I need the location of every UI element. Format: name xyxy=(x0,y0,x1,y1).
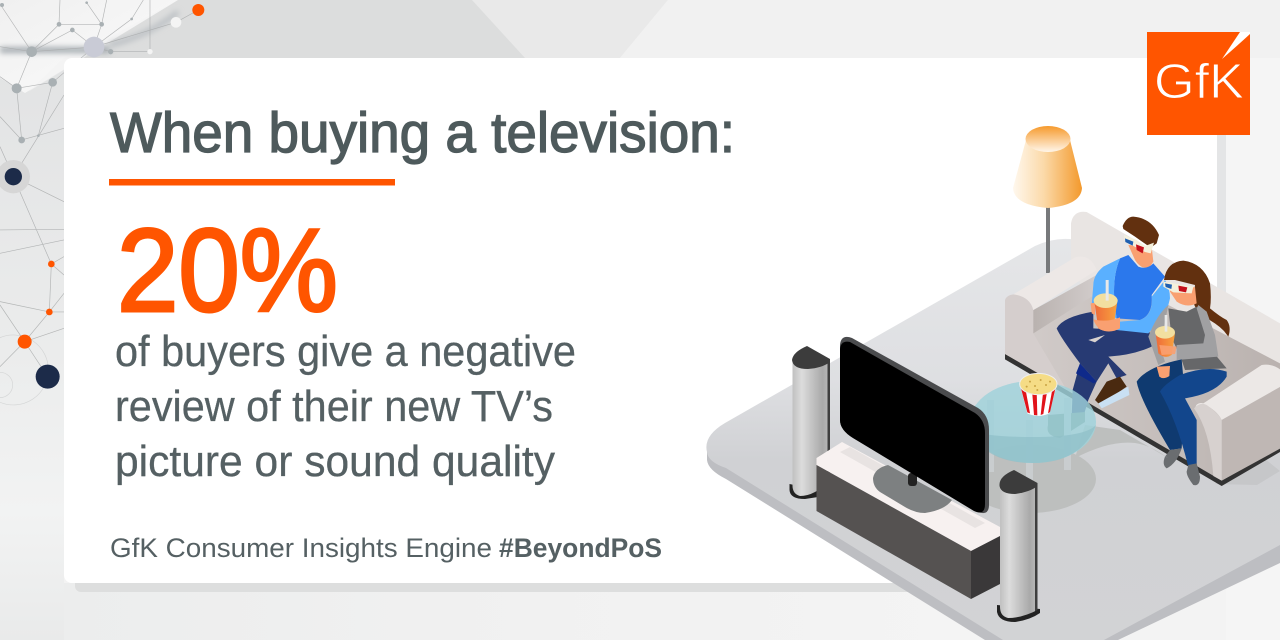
node halos xyxy=(0,160,30,193)
shoe xyxy=(1095,377,1127,405)
logo slash xyxy=(1222,32,1250,59)
head xyxy=(1128,245,1153,268)
source line xyxy=(110,533,662,563)
sweater xyxy=(1114,255,1165,320)
white nodes xyxy=(147,17,181,54)
TV cabinet xyxy=(816,442,1000,599)
orange nodes xyxy=(18,4,204,349)
drink xyxy=(1156,333,1175,357)
right speaker xyxy=(997,470,1040,622)
white card xyxy=(64,58,1217,583)
jeans xyxy=(1137,359,1185,450)
faint concentric circles xyxy=(0,335,48,405)
decorative network of nodes xyxy=(0,0,204,405)
statistic description: picture or sound quality xyxy=(115,437,555,486)
popcorn bucket xyxy=(1020,373,1057,416)
navy nodes xyxy=(5,168,60,389)
sofa and people xyxy=(1005,212,1280,486)
floor lamp xyxy=(1013,126,1082,273)
left speaker xyxy=(790,346,830,499)
shoes xyxy=(1164,448,1182,468)
hair xyxy=(1123,217,1159,248)
man xyxy=(1057,217,1170,417)
television xyxy=(840,337,989,513)
sofa floor shadow xyxy=(1215,455,1280,485)
sweater xyxy=(1168,307,1227,370)
source line: GfK Consumer Insights Engine xyxy=(110,533,492,563)
far leg behind the table xyxy=(1072,363,1097,417)
3D glasses xyxy=(1124,235,1154,253)
statistic description xyxy=(115,327,576,486)
source line: #BeyondPoS xyxy=(499,533,662,563)
big statistic: 20% xyxy=(117,205,338,337)
orange divider xyxy=(109,179,395,186)
hand xyxy=(1093,317,1120,331)
card shadow xyxy=(75,570,915,592)
large lilac node xyxy=(84,37,104,57)
wall stripe xyxy=(1216,58,1226,338)
statistic description: of buyers give a negative xyxy=(115,327,576,376)
heading: When buying a television: xyxy=(110,101,735,165)
hair xyxy=(1164,261,1230,337)
hand xyxy=(1157,366,1170,378)
face xyxy=(1170,285,1197,305)
grey nodes xyxy=(0,1,133,143)
TV stand xyxy=(873,465,952,513)
GfK logo xyxy=(1147,32,1250,135)
coffee table xyxy=(964,373,1168,513)
3D glasses xyxy=(1163,282,1193,293)
drink xyxy=(1091,303,1095,315)
shoe seen through glass xyxy=(1048,412,1085,438)
jeans xyxy=(1057,312,1152,382)
sofa xyxy=(1005,212,1280,486)
illustration: living room xyxy=(706,126,1280,640)
logo wordmark: GfK xyxy=(1154,55,1244,109)
floor platform xyxy=(706,239,1280,640)
statistic description: review of their new TV’s xyxy=(115,382,553,431)
woman xyxy=(1137,261,1230,485)
